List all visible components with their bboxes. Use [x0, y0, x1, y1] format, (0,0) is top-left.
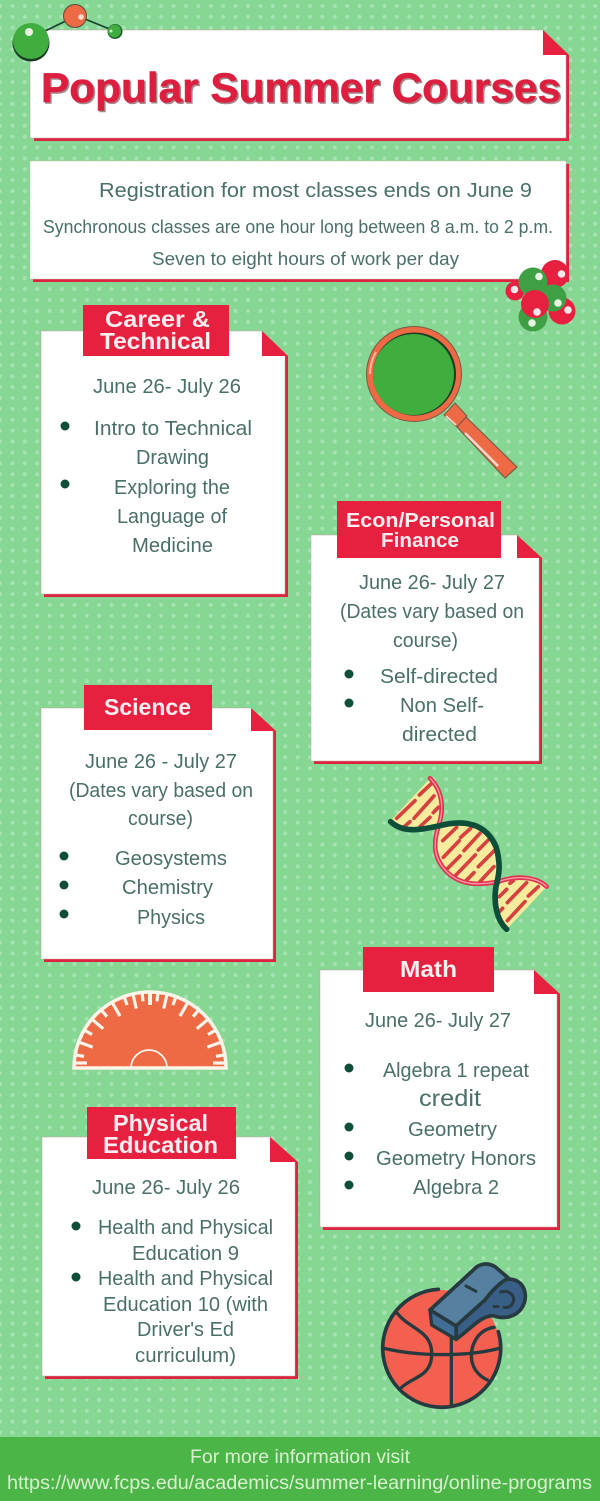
course list: Health and Physical	[98, 1217, 273, 1239]
title: Popular Summer Courses	[42, 66, 562, 112]
panel: Econ and Personal Finance	[311, 501, 542, 764]
course list: Algebra 2	[413, 1177, 499, 1199]
course list: Geometry Honors	[376, 1148, 536, 1170]
icon: molecule	[12, 4, 122, 62]
course list: Self-directed	[380, 666, 498, 688]
course list: Geosystems	[115, 848, 227, 870]
course list: Drawing	[136, 447, 209, 469]
course list: Language of	[117, 506, 227, 528]
heading tab: Career &	[105, 306, 210, 332]
footer url: https://www.fcps.edu/academics/summer-learning/online-programs	[7, 1473, 592, 1494]
course list: curriculum)	[135, 1345, 236, 1367]
course list: Education 9	[132, 1243, 239, 1265]
dates: June 26- July 26	[93, 376, 241, 398]
panel: Math	[320, 947, 560, 1230]
heading tab: Education	[103, 1132, 218, 1158]
icon: DNA helix	[390, 778, 547, 929]
heading tab: Technical	[100, 328, 211, 354]
course list	[72, 1217, 273, 1367]
heading tab	[363, 947, 494, 992]
course list: Chemistry	[122, 877, 213, 899]
course list: Algebra 1 repeat	[383, 1060, 529, 1082]
dates: (Dates vary based on	[340, 601, 524, 623]
heading tab	[337, 501, 501, 558]
course list: Intro to Technical	[94, 418, 252, 440]
footer prompt: For more information visit	[190, 1447, 411, 1468]
heading tab	[83, 305, 229, 356]
text: registration deadline: Registration for most classes ends on June 9	[99, 180, 532, 202]
heading tab: Physical	[113, 1110, 208, 1136]
heading tab	[87, 1107, 236, 1159]
course list: Physics	[137, 907, 205, 929]
heading tab	[84, 685, 212, 730]
course list: Exploring the	[114, 477, 230, 499]
course list: Non Self-	[400, 695, 484, 717]
dates: June 26- July 26	[92, 1177, 240, 1199]
dates: course)	[128, 808, 193, 830]
course list: Geometry	[408, 1119, 497, 1141]
text: class length: Synchronous classes are one hour long between 8 a.m. to 2 p.m.	[43, 217, 553, 237]
panel: title	[30, 30, 569, 141]
dates: June 26 - July 27	[85, 751, 237, 773]
course list: credit	[419, 1085, 482, 1111]
panel: registration info	[30, 161, 569, 282]
course list	[344, 666, 498, 746]
icon: magnifying glass	[366, 326, 517, 478]
dates	[340, 572, 524, 652]
course list: Education 10 (with	[103, 1294, 268, 1316]
heading tab: Econ/Personal	[346, 510, 495, 532]
dates: course)	[393, 630, 458, 652]
course list: directed	[402, 724, 477, 746]
title: Popular Summer Courses	[41, 64, 561, 111]
heading tab: Science	[104, 694, 191, 720]
course list: Health and Physical	[98, 1268, 273, 1290]
course list	[60, 418, 252, 557]
course list	[60, 848, 227, 929]
dates: June 26- July 27	[359, 572, 505, 594]
icon: basketball and whistle	[383, 1264, 525, 1407]
footer	[0, 1437, 600, 1501]
dates	[69, 751, 253, 830]
panel: Career and Technical	[41, 305, 288, 597]
heading tab: Math	[400, 956, 457, 982]
text: hours of work: Seven to eight hours of work per day	[152, 249, 459, 269]
icon: protractor	[74, 992, 226, 1068]
course list: Driver's Ed	[137, 1319, 234, 1341]
panel: Science	[41, 685, 276, 962]
dates: (Dates vary based on	[69, 780, 253, 802]
course list	[344, 1060, 536, 1199]
panel: Physical Education	[42, 1107, 298, 1379]
dates: June 26- July 27	[365, 1010, 511, 1032]
course list: Medicine	[132, 535, 213, 557]
heading tab: Finance	[381, 530, 459, 552]
icon: berry cluster	[506, 260, 576, 332]
